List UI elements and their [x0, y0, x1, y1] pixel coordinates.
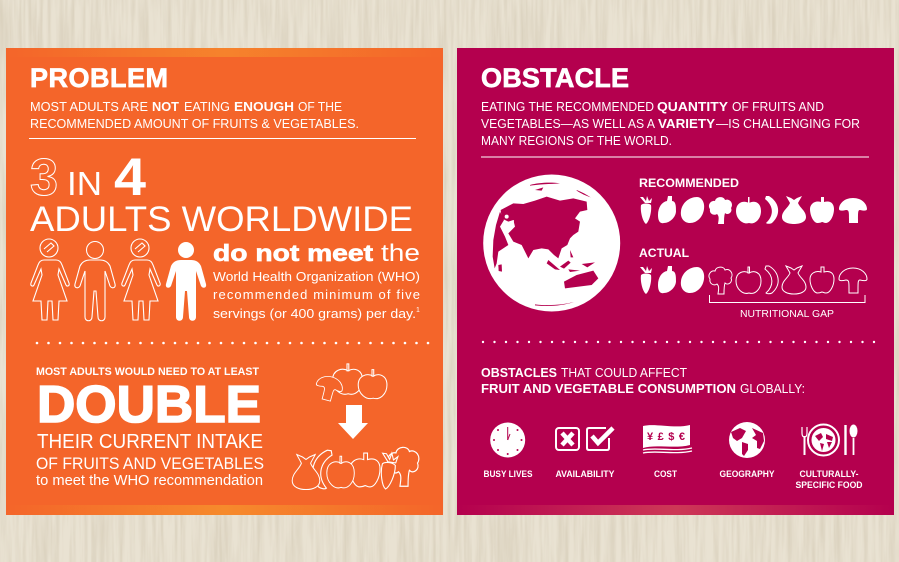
obstacle: cost: COST — [654, 469, 677, 480]
text: do not meet WHO minimum: recommended minimum of five — [213, 287, 420, 302]
obstacles heading: OBSTACLES — [481, 365, 557, 380]
obstacle intro text: VEGETABLES—AS WELL AS A — [481, 116, 655, 131]
obstacle intro text: EATING THE RECOMMENDED — [481, 99, 654, 114]
statistic: 3 in 4 adults worldwide: IN — [67, 165, 102, 202]
obstacle: culturally-specific food: SPECIFIC FOOD — [796, 480, 863, 491]
obstacle: geography: GEOGRAPHY — [720, 469, 775, 480]
text: double intake — [36, 366, 264, 489]
problem intro text: OF THE — [298, 99, 342, 114]
obstacles heading — [481, 365, 805, 396]
text: double intake: to meet the WHO recommendation — [36, 472, 263, 489]
text: do not meet WHO minimum: servings (or 400 grams) per day. — [213, 306, 416, 321]
text: double intake: MOST ADULTS WOULD NEED TO AT LEAST — [36, 366, 259, 378]
text: do not meet WHO minimum — [213, 240, 420, 321]
obstacle: culturally-specific food: CULTURALLY- — [800, 469, 858, 480]
statistic: 3 in 4 adults worldwide: ADULTS WORLDWIDE — [30, 200, 413, 239]
obstacle: availability — [556, 428, 615, 480]
obstacle intro text: QUANTITY — [657, 99, 728, 114]
problem intro text: ENOUGH — [234, 99, 294, 114]
recommended fruit row: RECOMMENDED — [639, 176, 739, 190]
obstacle: busy lives: BUSY LIVES — [484, 469, 532, 480]
statistic: 3 in 4 adults worldwide: 4 — [114, 148, 147, 207]
problem intro text — [30, 99, 359, 131]
obstacles heading: FRUIT AND VEGETABLE CONSUMPTION — [481, 381, 736, 396]
heading: problem: PROBLEM — [30, 63, 168, 93]
text: do not meet WHO minimum: World Health Organization (WHO) — [213, 269, 420, 284]
icon: four people, three outlined and one solid — [31, 239, 206, 321]
panel: obstacle — [457, 48, 894, 515]
text: double intake: THEIR CURRENT INTAKE — [37, 431, 263, 453]
actual fruit row with nutritional gap: NUTRITIONAL GAP — [740, 309, 834, 320]
panel: problem — [6, 48, 443, 515]
text: do not meet WHO minimum: 1 — [416, 307, 420, 314]
heading: obstacle: OBSTACLE — [481, 63, 629, 93]
recommended fruit row — [639, 176, 867, 224]
problem intro text: EATING — [184, 99, 230, 114]
problem intro text: RECOMMENDED AMOUNT OF FRUITS & VEGETABLES. — [30, 116, 359, 131]
actual fruit row with nutritional gap — [639, 246, 867, 320]
obstacle: cost — [643, 425, 692, 480]
problem intro text: NOT — [152, 99, 179, 114]
obstacles heading: GLOBALLY: — [740, 381, 805, 396]
text: double intake: DOUBLE — [37, 376, 261, 434]
obstacles heading: THAT COULD AFFECT — [561, 365, 687, 380]
obstacle intro text: OF FRUITS AND — [732, 99, 824, 114]
arrow: down — [338, 405, 368, 439]
actual fruit row with nutritional gap: ACTUAL — [639, 246, 689, 260]
statistic: 3 in 4 adults worldwide: 3 — [30, 149, 58, 207]
obstacle intro text: MANY REGIONS OF THE WORLD. — [481, 133, 672, 148]
text: do not meet WHO minimum: the — [381, 240, 420, 267]
obstacle intro text — [481, 99, 860, 148]
obstacle: geography — [720, 422, 775, 480]
problem intro text: MOST ADULTS ARE — [30, 99, 148, 114]
icon: current fruit — [313, 364, 387, 403]
obstacle: culturally-specific food — [796, 424, 863, 491]
text: do not meet WHO minimum: do not meet — [213, 240, 373, 266]
icon: doubled fruit and vegetables — [292, 447, 419, 490]
obstacle: cost: ¥£$€ — [647, 431, 685, 443]
obstacle: availability: AVAILABILITY — [556, 469, 615, 480]
obstacle intro text: VARIETY — [658, 116, 715, 131]
obstacle intro text: —IS CHALLENGING FOR — [716, 116, 860, 131]
obstacle: busy lives — [484, 422, 532, 480]
icon: globe — [483, 174, 620, 312]
statistic: 3 in 4 adults worldwide — [30, 148, 413, 239]
text: double intake: OF FRUITS AND VEGETABLES — [36, 454, 264, 473]
